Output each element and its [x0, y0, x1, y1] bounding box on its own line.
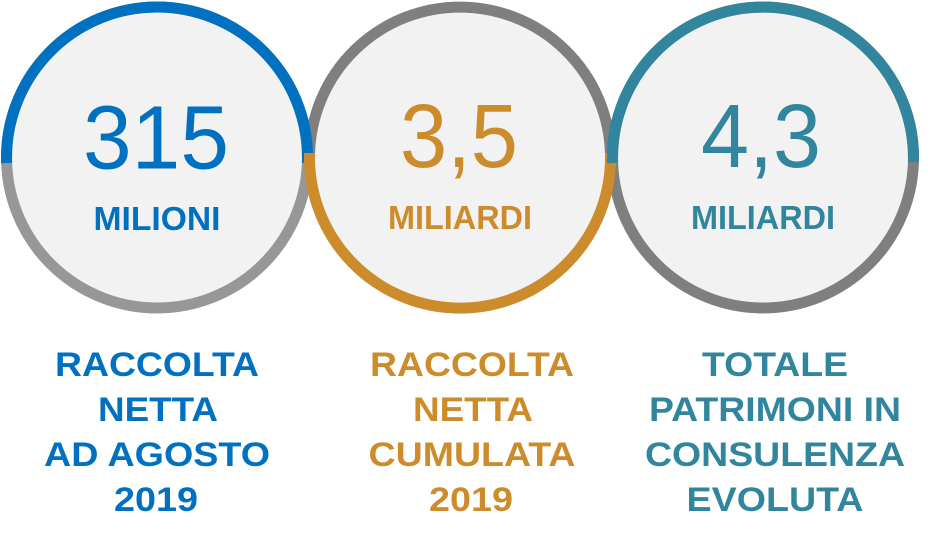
label: totale patrimoni in consulenza evoluta: EVOLUTA	[686, 481, 864, 519]
label: raccolta netta ad agosto 2019	[44, 346, 270, 519]
arc: teal top of circle 3	[613, 7, 914, 163]
label: raccolta netta ad agosto 2019: RACCOLTA	[55, 346, 259, 384]
label: raccolta netta ad agosto 2019: 2019	[114, 481, 198, 519]
arc: blue top of circle 1	[6, 7, 307, 163]
label: totale patrimoni in consulenza evoluta: CONSULENZA	[645, 436, 905, 474]
value: 4,3: 4,3	[701, 87, 821, 187]
label: raccolta netta cumulata 2019	[368, 346, 576, 519]
label: raccolta netta ad agosto 2019: AD AGOSTO	[44, 436, 270, 474]
circle 3: 4,3 miliardi	[612, 7, 914, 308]
label: raccolta netta cumulata 2019: CUMULATA	[368, 436, 576, 474]
circle 1: 315 milioni	[6, 7, 308, 308]
unit: miliardi gold: MILIARDI	[388, 199, 532, 236]
label: totale patrimoni in consulenza evoluta: PATRIMONI IN	[649, 391, 901, 429]
arc: gold bottom of circle 2	[310, 153, 610, 308]
unit: miliardi teal: MILIARDI	[691, 199, 835, 236]
label: raccolta netta cumulata 2019: RACCOLTA	[370, 346, 574, 384]
label: totale patrimoni in consulenza evoluta: TOTALE	[702, 346, 848, 384]
label: totale patrimoni in consulenza evoluta	[645, 346, 905, 519]
label: raccolta netta cumulata 2019: NETTA	[413, 391, 533, 429]
label: raccolta netta cumulata 2019: 2019	[429, 481, 513, 519]
label: raccolta netta ad agosto 2019: NETTA	[98, 391, 218, 429]
unit: milioni: MILIONI	[94, 200, 220, 237]
circle 2: 3,5 miliardi	[310, 7, 610, 308]
value: 315: 315	[83, 88, 229, 188]
value: 3,5: 3,5	[400, 87, 518, 187]
